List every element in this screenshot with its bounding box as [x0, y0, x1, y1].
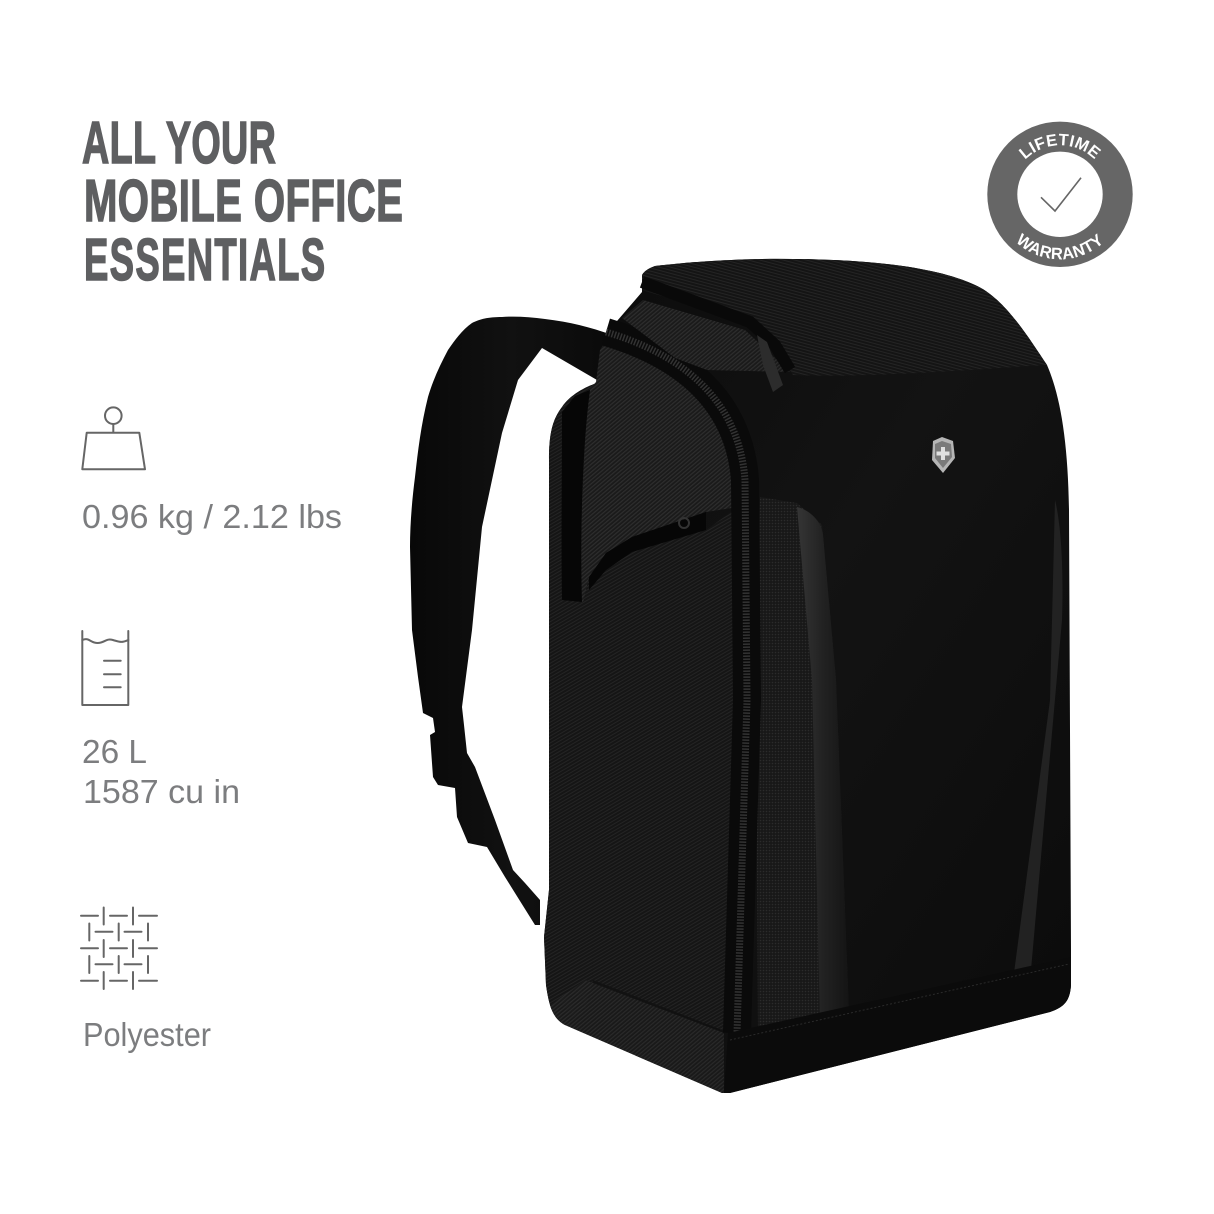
volume text: 1587 cu in — [83, 773, 240, 810]
top zipper — [642, 282, 790, 370]
main zipper — [606, 332, 747, 1033]
top flap — [642, 259, 1047, 376]
mesh strip — [756, 497, 849, 1033]
icon: volume beaker — [82, 631, 128, 705]
base band — [724, 957, 1071, 1093]
side pocket — [583, 507, 738, 1033]
shoulder strap — [410, 317, 612, 925]
icon: woven material — [81, 908, 157, 989]
lower corner panel — [550, 980, 724, 1093]
backpack body — [544, 259, 1071, 1093]
volume text — [82, 733, 240, 810]
right gloss strip — [1014, 500, 1063, 973]
title — [82, 111, 403, 293]
title: ALL YOUR — [82, 111, 276, 176]
weight text: 0.96 kg / 2.12 lbs — [82, 498, 342, 535]
upper side panel — [578, 330, 738, 603]
left edge strip — [544, 383, 600, 1025]
backpack — [410, 259, 1071, 1093]
top panel behind zip — [622, 300, 790, 372]
icon: weight — [82, 407, 145, 469]
badge: lifetime warranty: WARRANTY — [1018, 232, 1101, 260]
material text: Polyester — [83, 1016, 211, 1053]
side slot — [562, 390, 590, 602]
badge: lifetime warranty — [987, 122, 1133, 267]
title: ESSENTIALS — [84, 228, 325, 293]
logo shield — [932, 437, 955, 473]
title: MOBILE OFFICE — [84, 167, 403, 234]
pocket zip pull — [589, 512, 706, 590]
zipper pull — [757, 335, 783, 392]
volume text: 26 L — [82, 733, 147, 770]
left gloss strip — [797, 507, 849, 1021]
badge: lifetime warranty: LIFETIME — [1018, 134, 1102, 159]
